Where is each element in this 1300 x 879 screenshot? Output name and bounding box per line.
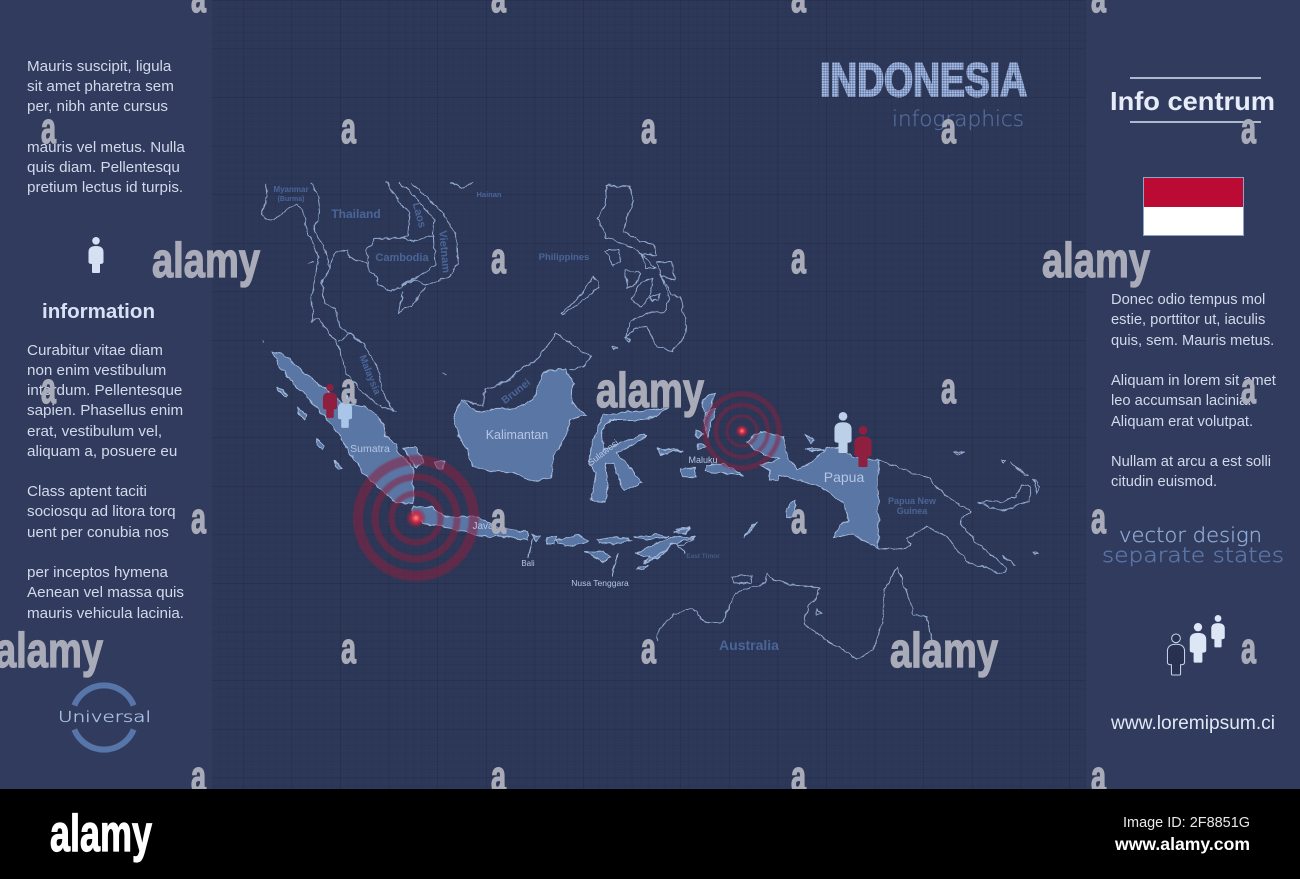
labels: Indonesian regions: Papua	[824, 469, 864, 485]
left panel: body text: mauris vehicula lacinia.	[27, 605, 184, 622]
watermark words	[0, 234, 1150, 678]
person icon: Papua blue	[834, 412, 852, 453]
labels: Indonesian regions	[350, 428, 864, 588]
outline: Papua New Guinea and Australia	[657, 452, 1040, 658]
left panel: body text: uent per conubia nos	[27, 524, 169, 541]
map of Indonesia and neighbours	[262, 182, 1040, 658]
watermark letters: a	[791, 752, 806, 801]
right panel: body text: citudin euismod.	[1111, 474, 1217, 490]
watermark words: alamy	[1042, 234, 1150, 288]
labels: neighbouring countries: Thailand	[331, 207, 381, 221]
labels: Indonesian regions: Kalimantan	[486, 428, 548, 442]
labels: neighbouring countries: Brunei	[499, 377, 533, 407]
flag of Indonesia	[1144, 178, 1244, 236]
watermark letters: a	[491, 234, 506, 283]
footer logo: alamy	[50, 805, 152, 863]
labels: neighbouring countries	[273, 185, 937, 653]
right panel: body text: Nullam at arcu a est solli	[1111, 454, 1271, 470]
labels: neighbouring countries: Guinea	[897, 506, 928, 516]
labels: Indonesian regions: Nusa Tenggara	[571, 578, 629, 588]
tagline: separate states: separate states	[1102, 543, 1284, 567]
footer url: www.alamy.com	[1114, 834, 1250, 854]
right panel: body text: Donec odio tempus mol	[1111, 292, 1265, 308]
watermark letters: a	[191, 494, 206, 543]
right panel: body text: Aliquam erat volutpat.	[1111, 414, 1253, 430]
region: Sumatra	[272, 352, 445, 503]
watermark letters: a	[41, 364, 56, 413]
right panel: Info centrum heading	[1110, 78, 1275, 122]
left panel: body text: sapien. Phasellus enim	[27, 402, 183, 419]
earthquake rings: Java	[358, 460, 474, 576]
watermark letters: a	[1241, 104, 1256, 153]
person icon: Papua red	[854, 426, 872, 467]
region: Sulawesi	[588, 408, 668, 502]
person icon: outline	[1167, 634, 1185, 675]
labels: neighbouring countries: Vietnam	[436, 230, 452, 274]
left panel: intro text	[27, 58, 185, 196]
watermark letters: a	[1091, 494, 1106, 543]
website link: www.loremipsum.ci	[1110, 712, 1275, 734]
right panel: body text	[1111, 292, 1276, 490]
watermark letters: a	[641, 104, 656, 153]
watermark words: alamy	[596, 364, 704, 418]
right panel: body text: estie, porttitor ut, iaculis	[1111, 312, 1265, 328]
subtitle: infographics: infographics	[892, 107, 1024, 131]
outline: mainland Southeast Asia	[262, 182, 600, 412]
region: Java and Nusa Tenggara	[413, 507, 697, 577]
watermark letters: a	[941, 104, 956, 153]
left panel: body text: aliquam a, posuere eu	[27, 443, 177, 460]
map geometry	[262, 182, 1040, 658]
left panel: intro text: quis diam. Pellentesqu	[27, 159, 180, 176]
labels: Indonesian regions: Java	[472, 521, 494, 532]
earthquake rings: Maluku	[705, 394, 779, 468]
watermark letters: a	[941, 364, 956, 413]
labels: neighbouring countries: Australia	[719, 637, 779, 653]
title: INDONESIA: INDONESIA	[820, 53, 1027, 106]
left panel: person icon	[88, 237, 104, 273]
logo: Universal	[58, 685, 151, 750]
watermark letters: a	[491, 494, 506, 543]
watermark letters: a	[341, 624, 356, 673]
labels: neighbouring countries: Myanmar	[273, 185, 309, 194]
watermark letters: a	[1241, 364, 1256, 413]
right panel: Info centrum heading: Info centrum	[1110, 86, 1275, 116]
watermark letters: a	[41, 104, 56, 153]
labels: neighbouring countries: Laos	[410, 201, 428, 229]
person icon: medium	[1190, 623, 1206, 663]
region: Kalimantan	[453, 368, 587, 482]
left panel: body text: erat, vestibulum vel,	[27, 423, 162, 440]
logo: Universal: Universal	[58, 708, 151, 726]
left panel: intro text: per, nibh ante cursus	[27, 98, 168, 115]
labels: Indonesian regions: Sulawesi	[586, 438, 620, 468]
left panel: information heading: information	[42, 301, 155, 323]
labels: neighbouring countries: Cambodia	[375, 252, 429, 264]
left panel: body text	[27, 342, 184, 622]
labels: Indonesian regions: Bali	[521, 559, 535, 568]
tagline: vector design: vector design	[1119, 523, 1262, 547]
watermark words: alamy	[152, 234, 260, 288]
watermark letters: a	[641, 624, 656, 673]
person icon: Sumatra blue	[338, 394, 352, 428]
people icons	[1167, 615, 1225, 675]
left panel: body text: interdum. Pellentesque	[27, 382, 182, 399]
left panel: intro text: sit amet pharetra sem	[27, 78, 174, 95]
person icon: Sumatra red	[323, 384, 337, 418]
labels: neighbouring countries: Malaysia	[356, 354, 382, 397]
labels: Indonesian regions: Sumatra	[350, 443, 390, 455]
left panel: intro text: pretium lectus id turpis.	[27, 179, 183, 196]
labels: neighbouring countries: (Burma)	[278, 196, 304, 203]
right panel: body text: leo accumsan lacinia.	[1111, 393, 1251, 409]
watermark letters: a	[791, 234, 806, 283]
watermark letters: a	[191, 752, 206, 801]
image id: Image ID: 2F8851G	[1123, 815, 1250, 831]
earthquake epicentre: Java	[406, 508, 426, 528]
left panel: body text: per inceptos hymena	[27, 564, 169, 581]
labels: neighbouring countries: Papua New	[888, 496, 937, 506]
watermark words: alamy	[890, 624, 998, 678]
watermark letters: a	[491, 752, 506, 801]
watermark letters: a	[341, 364, 356, 413]
left panel: intro text: mauris vel metus. Nulla	[27, 139, 185, 156]
left panel: body text: non enim vestibulum	[27, 362, 166, 379]
right panel: body text: quis, sem. Mauris metus.	[1111, 333, 1274, 349]
earthquake epicentre: Maluku	[736, 424, 748, 438]
watermark letters: a	[1241, 624, 1256, 673]
outline: Philippines	[598, 185, 687, 352]
footer bar	[0, 789, 1300, 879]
labels: neighbouring countries: East Timor	[686, 553, 720, 560]
right panel: body text: Aliquam in lorem sit amet	[1111, 373, 1276, 389]
labels: neighbouring countries: Philippines	[539, 252, 589, 263]
person icon: small	[1211, 615, 1225, 647]
labels: Indonesian regions: Maluku	[688, 455, 718, 465]
left panel: intro text: Mauris suscipit, ligula	[27, 58, 172, 75]
left panel: body text: sociosqu ad litora torq	[27, 503, 176, 520]
region: Maluku and Papua	[637, 393, 878, 558]
labels: neighbouring countries: Hainan	[476, 190, 502, 199]
left panel: body text: Aenean vel massa quis	[27, 584, 184, 601]
watermark letters: a	[791, 494, 806, 543]
left panel: body text: Class aptent taciti	[27, 483, 147, 500]
watermark letters: a	[1091, 752, 1106, 801]
map grid panel	[212, 0, 1086, 789]
left panel: body text: Curabitur vitae diam	[27, 342, 163, 359]
watermark letters: a	[341, 104, 356, 153]
